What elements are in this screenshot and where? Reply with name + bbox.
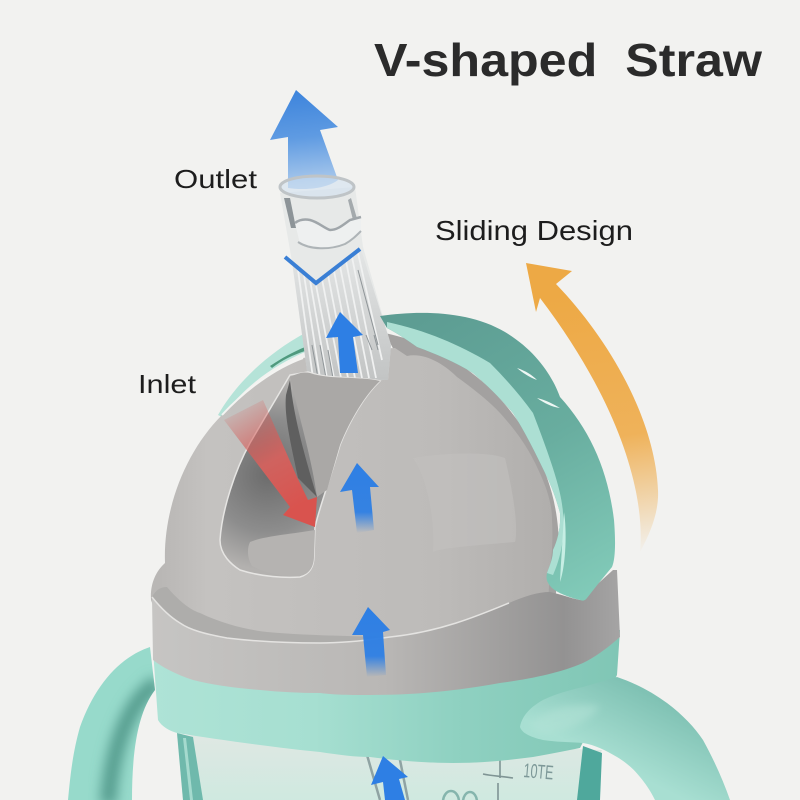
teal collar xyxy=(153,630,620,763)
label: sliding design: Sliding Design xyxy=(435,215,633,246)
handle root highlight xyxy=(530,705,600,733)
recess floor step xyxy=(248,530,315,576)
bottle body: 10TE xyxy=(523,760,554,785)
arrow: outlet blue up xyxy=(270,90,338,189)
handle: right xyxy=(520,677,730,800)
ring shoulder shadow xyxy=(152,587,390,643)
straw xyxy=(280,176,391,380)
arrow: blue in straw xyxy=(326,312,363,373)
straw recess xyxy=(220,372,380,577)
cover lower highlight xyxy=(560,512,566,582)
bottle body xyxy=(177,733,602,800)
arrow: blue ring xyxy=(352,607,390,677)
arrow: red inlet xyxy=(224,400,317,527)
teal cover: rear left edge xyxy=(218,333,305,417)
arrow: sliding orange xyxy=(526,263,658,552)
lid base ring band xyxy=(152,570,620,695)
title: V-shaped Straw xyxy=(374,34,762,86)
cover light inner band xyxy=(387,322,564,575)
teal sliding cover band xyxy=(380,313,615,601)
handle: left xyxy=(68,647,158,800)
arrow: blue dome xyxy=(340,463,379,533)
label: inlet: Inlet xyxy=(138,369,197,399)
recess dark slit xyxy=(286,380,317,497)
v-shape mark xyxy=(285,249,360,283)
lid dome xyxy=(151,348,552,645)
dome back shading xyxy=(385,333,559,600)
arrow: blue bottle xyxy=(371,756,408,800)
dome highlight edge xyxy=(222,358,303,415)
cover highlights xyxy=(517,368,560,408)
ring highlight edge xyxy=(152,597,509,643)
dome inner panel xyxy=(413,454,516,552)
recess column xyxy=(290,372,380,497)
label: outlet: Outlet xyxy=(174,164,258,194)
